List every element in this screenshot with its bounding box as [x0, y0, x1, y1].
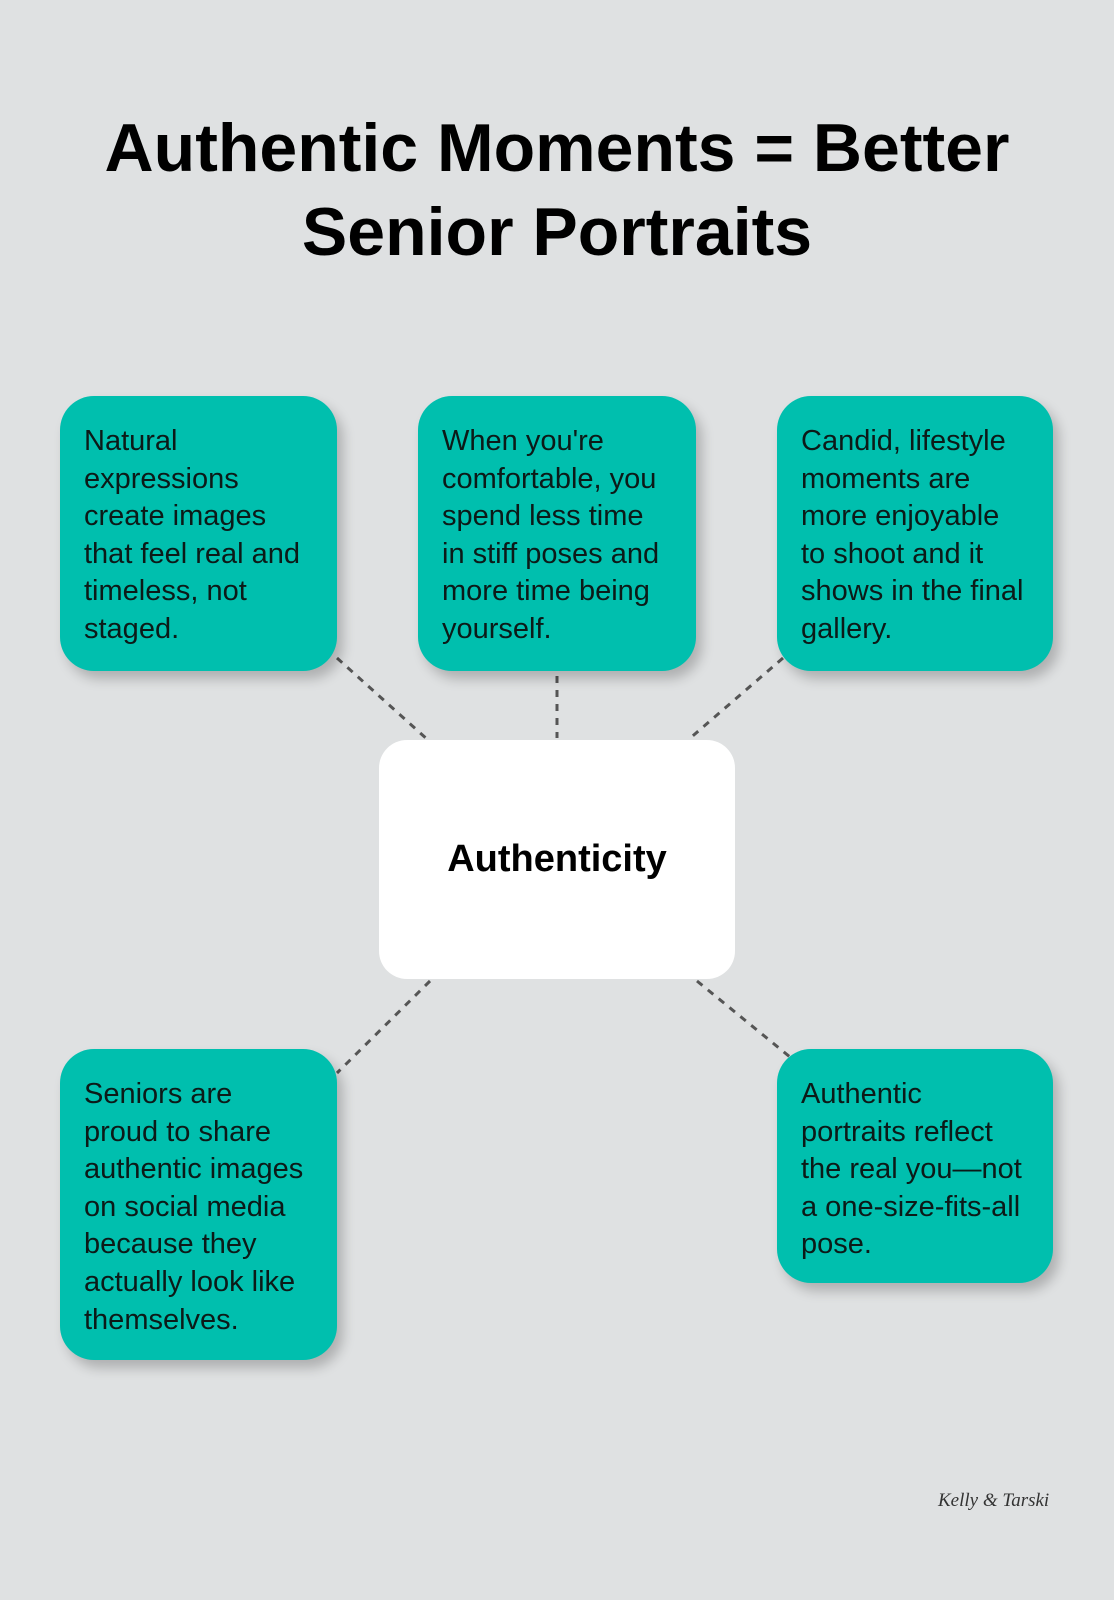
box: real you: the real you—not	[801, 1153, 1022, 1185]
title: Authentic Moments = Better	[105, 110, 1009, 186]
box: social media: authentic images	[84, 1153, 303, 1185]
box: candid: Candid, lifestyle	[801, 425, 1006, 457]
box: candid: shows in the final	[801, 575, 1023, 607]
box: social media: actually look like	[84, 1266, 295, 1298]
box: candid	[777, 396, 1053, 671]
box: candid: to shoot and it	[801, 538, 983, 570]
box: social media: themselves.	[84, 1304, 239, 1336]
box: real you: a one-size-fits-all	[801, 1191, 1020, 1223]
box: natural expressions	[60, 396, 337, 671]
box: real you: Authentic	[801, 1078, 922, 1110]
box: comfortable: spend less time	[442, 500, 644, 532]
title: Senior Portraits	[302, 194, 812, 270]
box: social media	[60, 1049, 337, 1360]
center: authenticity	[379, 740, 735, 979]
box: social media: proud to share	[84, 1116, 271, 1148]
box: natural expressions: staged.	[84, 613, 179, 645]
center: authenticity: Authenticity	[447, 838, 667, 880]
box: candid: gallery.	[801, 613, 892, 645]
box: comfortable	[418, 396, 696, 671]
box: comfortable: comfortable, you	[442, 463, 656, 495]
box: candid: more enjoyable	[801, 500, 999, 532]
logo signature: Kelly & Tarski	[938, 1490, 1049, 1511]
box: natural expressions: Natural	[84, 425, 178, 457]
box: real you: pose.	[801, 1228, 872, 1260]
box: comfortable: more time being	[442, 575, 650, 607]
box: comfortable: When you're	[442, 425, 604, 457]
box: social media: on social media	[84, 1191, 286, 1223]
box: natural expressions: timeless, not	[84, 575, 247, 607]
title	[105, 110, 1009, 270]
box: natural expressions: that feel real and	[84, 538, 300, 570]
box: comfortable: in stiff poses and	[442, 538, 659, 570]
box: candid: moments are	[801, 463, 970, 495]
box: social media: Seniors are	[84, 1078, 232, 1110]
box: real you: portraits reflect	[801, 1116, 993, 1148]
box: real you	[777, 1049, 1053, 1283]
box: natural expressions: create images	[84, 500, 266, 532]
box: comfortable: yourself.	[442, 613, 552, 645]
box: natural expressions: expressions	[84, 463, 239, 495]
box: social media: because they	[84, 1228, 257, 1260]
